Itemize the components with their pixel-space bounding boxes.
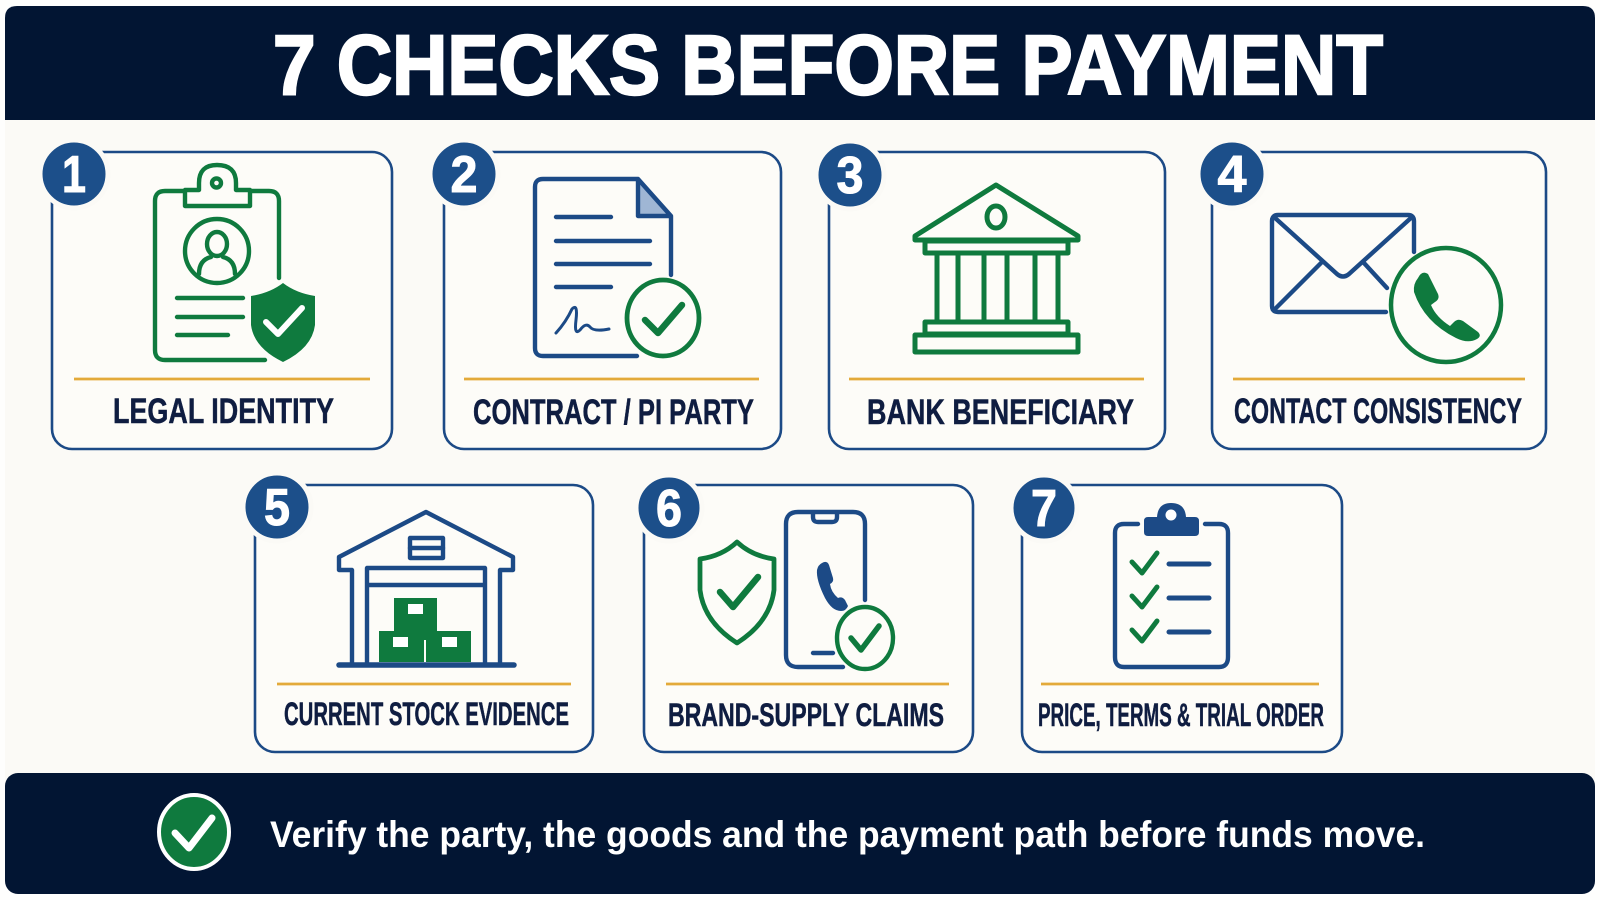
panel: check 4 contact	[1198, 140, 1546, 449]
footer message: Verify the party, the goods and the payment path before funds move.	[270, 814, 1425, 855]
badge 6: 6	[656, 480, 682, 538]
badge 2: 2	[450, 146, 478, 204]
title: 7 CHECKS BEFORE PAYMENT	[273, 18, 1383, 112]
icon: envelope and phone	[1272, 215, 1501, 362]
badge 5	[243, 473, 311, 541]
label: BANK BENEFICIARY	[867, 393, 1134, 432]
badge 7	[1011, 475, 1077, 541]
badge 5: 5	[264, 479, 290, 537]
badge 4: 4	[1218, 146, 1247, 204]
panel: check 7 price terms	[1011, 475, 1342, 752]
label: CURRENT STOCK EVIDENCE	[284, 696, 569, 732]
icon: warehouse with boxes	[339, 512, 514, 665]
panel: check 5 stock	[243, 473, 593, 752]
badge 2	[430, 140, 498, 208]
label: LEGAL IDENTITY	[113, 392, 334, 431]
badge 4	[1198, 140, 1266, 208]
icon: clipboard with identity and shield	[155, 165, 315, 362]
badge 3: 3	[836, 147, 864, 205]
badge 1	[40, 140, 108, 208]
icon: signed document	[535, 179, 699, 356]
icon: bank building	[915, 185, 1078, 352]
panel: check 1 legal identity	[40, 140, 392, 449]
label: PRICE, TERMS & TRIAL ORDER	[1038, 697, 1324, 733]
icon: shield, phone and check	[700, 512, 893, 669]
panel: check 6 brand supply	[636, 475, 973, 752]
panel: check 3 bank	[816, 141, 1165, 449]
panel: check 2 contract	[430, 140, 781, 449]
badge 7: 7	[1031, 480, 1057, 538]
title banner	[5, 6, 1595, 120]
icon: green check	[159, 795, 229, 869]
label: BRAND-SUPPLY CLAIMS	[668, 697, 944, 733]
badge 3	[816, 141, 884, 209]
footer banner	[5, 773, 1595, 894]
label: CONTRACT / PI PARTY	[473, 393, 754, 432]
badge 6	[636, 475, 702, 541]
badge 1: 1	[62, 146, 86, 204]
icon: checklist clipboard	[1115, 503, 1228, 667]
